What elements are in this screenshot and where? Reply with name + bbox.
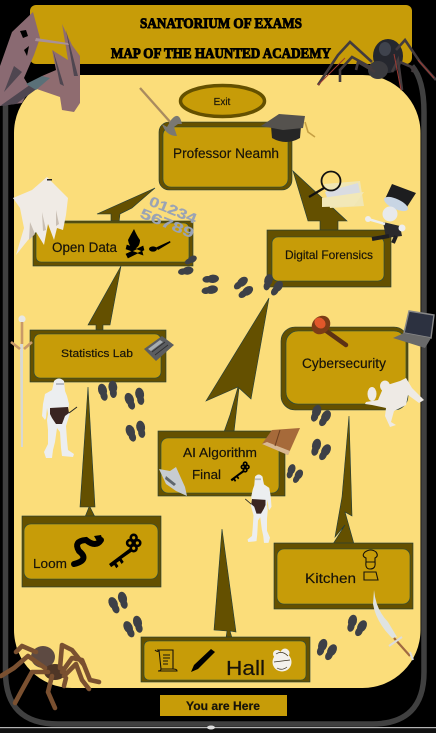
icon: graduation cap <box>261 114 315 142</box>
arrow: loom to statistics lab <box>80 387 95 517</box>
icon: small gold key <box>231 461 250 482</box>
icon: knight left <box>42 378 77 458</box>
icon: ornate key <box>109 534 142 568</box>
icon: crash dummy <box>365 378 424 427</box>
footprints <box>97 254 369 662</box>
icon: tarantula <box>1 645 99 708</box>
you are here label: You are Here <box>186 701 260 713</box>
arrow: statistics lab to open data <box>88 266 121 331</box>
title line 2: MAP OF THE HAUNTED ACADEMY <box>111 46 331 62</box>
icon: battle axe <box>140 88 182 136</box>
icon: ghost <box>13 177 68 255</box>
arrow: hall to ai algorithm <box>214 529 236 638</box>
professor neamh room <box>159 122 292 190</box>
exit node <box>180 86 264 116</box>
digital forensics room <box>267 230 391 287</box>
exit node: Exit <box>214 97 231 108</box>
arrow: open data to professor <box>97 188 155 222</box>
ai algorithm final room <box>158 431 285 496</box>
icon: pen <box>191 649 215 672</box>
loom room <box>22 516 161 587</box>
title line 1: SANATORIUM OF EXAMS <box>140 16 302 32</box>
title banner <box>30 5 412 64</box>
icon: torch <box>308 312 346 345</box>
icon: silver dragon statue <box>159 467 187 496</box>
icon: open book <box>262 428 300 455</box>
arrow: ai algorithm to corridor <box>206 298 269 432</box>
open data room: Open Data <box>52 240 117 255</box>
cybersecurity room: Cybersecurity <box>302 356 386 371</box>
kitchen room <box>274 543 413 609</box>
ai algorithm final room: Final <box>192 467 221 482</box>
icon: top-hat figure <box>365 184 416 243</box>
icon: magnifier and folder <box>309 172 364 208</box>
icon: white chef hat <box>272 648 292 672</box>
icon: black widow spider <box>318 39 436 90</box>
icon: laptop <box>393 311 434 348</box>
icon: floating numbers: 56789 <box>138 205 197 241</box>
icon: snake <box>74 535 103 564</box>
icon: campfire <box>126 229 144 258</box>
hall room: Hall <box>226 658 265 680</box>
statistics lab room <box>30 330 166 382</box>
icon: winged dragon <box>0 12 80 112</box>
loom room: Loom <box>33 556 67 571</box>
open data room <box>33 221 193 266</box>
you are here label <box>160 695 287 716</box>
icon: floating numbers: 01234 <box>147 193 199 227</box>
hall room <box>141 637 310 682</box>
arrow: kitchen to cybersecurity <box>333 416 354 544</box>
bottom edge strip <box>0 726 436 733</box>
cybersecurity room <box>281 327 408 410</box>
icon: small key <box>149 241 170 252</box>
icon: knight right <box>245 475 272 543</box>
ai algorithm final room: AI Algorithm <box>183 445 257 460</box>
icon: calculator <box>144 336 174 361</box>
icon: floating numbers <box>138 193 199 241</box>
kitchen room: Kitchen <box>305 571 356 586</box>
professor neamh room: Professor Neamh <box>173 146 279 161</box>
map floor panel <box>14 75 420 688</box>
arrow: digital forensics to professor <box>293 171 347 231</box>
icon: scroll <box>155 650 177 671</box>
digital forensics room: Digital Forensics <box>285 248 373 262</box>
statistics lab room: Statistics Lab <box>61 348 133 360</box>
icon: sword <box>11 315 32 447</box>
icon: chef <box>363 550 378 580</box>
icon: scimitar <box>373 590 413 660</box>
